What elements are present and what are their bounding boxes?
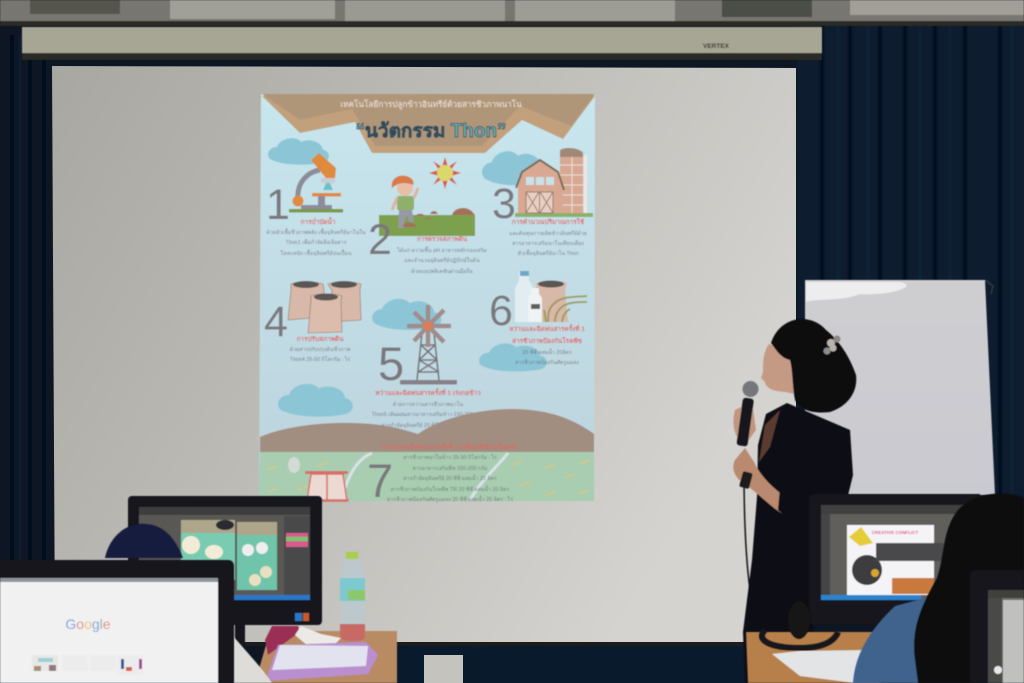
hills bbox=[260, 409, 594, 453]
front right monitor bbox=[970, 570, 1024, 683]
step 7 text: สารกำจัดจุลินทรีย์ 20 ซีซี ผสมน้ำ 20 ลิตร bbox=[403, 474, 497, 482]
projected infographic slide bbox=[259, 94, 595, 507]
step 7 text: สารชีวภาพป้องกันโรคพืช TR 20 ซีซี ผสมน้ำ 20 ลิตร bbox=[391, 485, 509, 493]
step 5 number: 5 bbox=[378, 337, 404, 390]
step 2 text bbox=[396, 235, 487, 275]
step 2 farmer on field bbox=[379, 176, 475, 236]
step 7 text: สารชีวภาพนาโนข้าว 25-50 กิโลกรัม : ไร่ bbox=[403, 453, 497, 461]
step 1 text: ด้วยหัวเชื้อชีวภาพพลัง เชื้อจุลินทรีย์นาโนใน bbox=[266, 228, 366, 236]
step 4 number: 4 bbox=[264, 298, 288, 346]
step 2 number: 2 bbox=[368, 216, 392, 264]
step 3 text: การคำนวณปริมาณการใช้ bbox=[512, 217, 585, 226]
step 2 text: ด้วยแอปพลิเคชันผ่านมือถือ bbox=[411, 268, 473, 275]
front left laptop bbox=[0, 560, 234, 683]
face bbox=[761, 344, 800, 395]
white sleeve of audience member bbox=[233, 636, 272, 683]
papers bbox=[772, 650, 868, 683]
step 3 text: และต้นทุนการผลิตข้าวอินทรีย์ด้วย bbox=[509, 230, 587, 237]
pink pouch bbox=[265, 626, 300, 655]
step 7 table bbox=[305, 471, 349, 501]
seated student with long hair and denim jacket bbox=[853, 494, 1024, 683]
step 7 text: สารอาหารเสริมพืช 150-200 กรัม bbox=[413, 465, 487, 472]
ceiling bbox=[0, 0, 1024, 26]
slide title: เทคโนโลยีการปลูกข้าวอินทรีย์ด้วยสารชีวภาพนาโน bbox=[340, 99, 522, 110]
projection screen bbox=[52, 66, 796, 644]
step 7 number: 7 bbox=[367, 454, 393, 507]
step 2 text: การตรวจสภาพดิน bbox=[417, 235, 468, 243]
microphone cable bbox=[744, 470, 750, 660]
microphone bbox=[736, 381, 758, 447]
slide title bbox=[340, 99, 522, 142]
step 3 number: 3 bbox=[492, 180, 516, 228]
step 5 text: ด้วยการหว่านสารชีวภาพนาโน bbox=[393, 401, 463, 408]
step 3 text: หัวเชื้อจุลินทรีย์นาโน Thon bbox=[517, 249, 579, 257]
step 7 text: สารชีวภาพป้องกันศัตรูแมลง 20 ซีซี ผสมน้ำ 20 ลิตร : ไร่ bbox=[387, 495, 513, 503]
step 1 microscope bbox=[289, 153, 343, 212]
step 7 text bbox=[382, 441, 518, 503]
step 6 text: สารชีวภาพป้องกันโรคพืช bbox=[512, 336, 583, 345]
rice field bbox=[259, 452, 594, 501]
step 4 soil bags bbox=[288, 281, 361, 333]
step 6 text: สารชีวภาพป้องกันศัตรูแมลง bbox=[515, 359, 579, 366]
sun bbox=[429, 157, 461, 189]
front table bbox=[233, 552, 397, 683]
water bottle bbox=[340, 552, 365, 641]
step 3 text bbox=[509, 217, 587, 257]
slide title: “นวัตกรรม Thon” bbox=[355, 121, 507, 142]
purple folder and paper bbox=[266, 642, 378, 680]
dress bbox=[743, 403, 853, 683]
step 5 windmill bbox=[400, 305, 457, 384]
step 5 text: สารกำจัดจุลินทรีย์ 20 ซีซี ผสมน้ำ 20 ลิตร bbox=[381, 421, 475, 429]
whiteboard bbox=[805, 280, 995, 495]
long black hair bbox=[914, 494, 1024, 683]
step 1 number: 1 bbox=[266, 181, 290, 229]
step 1 text: Thon1 เพื่อกำจัดสิ่งเจือสาร bbox=[286, 238, 346, 246]
browser thumbnails bbox=[32, 655, 143, 675]
step 2 text: และจำนวนจุลินทรีย์ปฏิปักษ์ในดิน bbox=[404, 257, 480, 264]
tissue bbox=[295, 626, 341, 646]
arm bbox=[733, 448, 787, 514]
sleeve bbox=[778, 487, 800, 522]
header banner bbox=[262, 94, 595, 153]
step 6 text: หว่านและฉีดพ่นสารครั้งที่ 1 bbox=[509, 323, 585, 333]
denim jacket bbox=[853, 598, 975, 683]
step 6 text bbox=[509, 323, 585, 366]
neckline pattern bbox=[759, 410, 780, 462]
step 5 text: Thon5 เติมผสมสารอาหารเสริมข้าว 150-200 กรัม bbox=[372, 411, 484, 418]
step 2 text: ได้แก่ ความชื้น pH อาหารหลักรองเสริม bbox=[396, 246, 487, 254]
step 3 text: สารอาหารเสริมนาโนเทียบเคียง bbox=[512, 240, 584, 247]
step 1 text: การบำบัดน้ำ bbox=[301, 216, 336, 226]
step 4 text: ด้วยสารปรับปรุงดินชีวภาพ bbox=[290, 346, 351, 353]
hair bbox=[771, 319, 856, 412]
audience member hat bbox=[105, 524, 183, 558]
step 3 barn and silo bbox=[515, 148, 593, 217]
presenter bbox=[733, 319, 856, 683]
step 1 text: โลหะหนัก เชื้อจุลินทรีย์ปนเปื้อน bbox=[280, 249, 352, 257]
step 4 text: Thon4 25-50 กิโลกรัม : ไร่ bbox=[290, 355, 350, 363]
projector screen housing: VERTEX bbox=[703, 43, 730, 50]
clouds bbox=[268, 138, 548, 417]
illustrator screen with cartoon birds: CREATIVE CONFLICT bbox=[872, 530, 918, 535]
step 5 text: หว่านและฉีดพ่นสารครั้งที่ 1 เร่งกอข้าว bbox=[375, 387, 481, 397]
right desk bbox=[746, 632, 880, 683]
headphones bbox=[762, 601, 838, 648]
illustrator workspace screen bbox=[139, 507, 310, 600]
step 5 text bbox=[372, 387, 484, 429]
step 6 bottles bag and rice plant bbox=[515, 271, 587, 322]
step 4 text bbox=[290, 335, 351, 363]
step 7 text: หว่านและฉีดพ่นสารครั้งที่ 2 เปลี่ยนสีเขียวเป็นทอง bbox=[382, 441, 518, 451]
step 4 text: การปรับสภาพดิน bbox=[297, 335, 344, 343]
step 6 number: 6 bbox=[489, 287, 513, 335]
step 6 text: 20 ซีซี ผสมน้ำ 20ลิตร bbox=[522, 348, 572, 356]
google wordmark: Google bbox=[65, 616, 111, 632]
step 1 text bbox=[266, 216, 366, 257]
watch bbox=[739, 471, 753, 489]
right monitor bbox=[809, 494, 980, 625]
illustrator screen with cartoon birds bbox=[821, 505, 969, 600]
back left monitor bbox=[128, 496, 322, 646]
hair clip bbox=[824, 336, 840, 354]
projector screen housing bbox=[22, 27, 822, 60]
